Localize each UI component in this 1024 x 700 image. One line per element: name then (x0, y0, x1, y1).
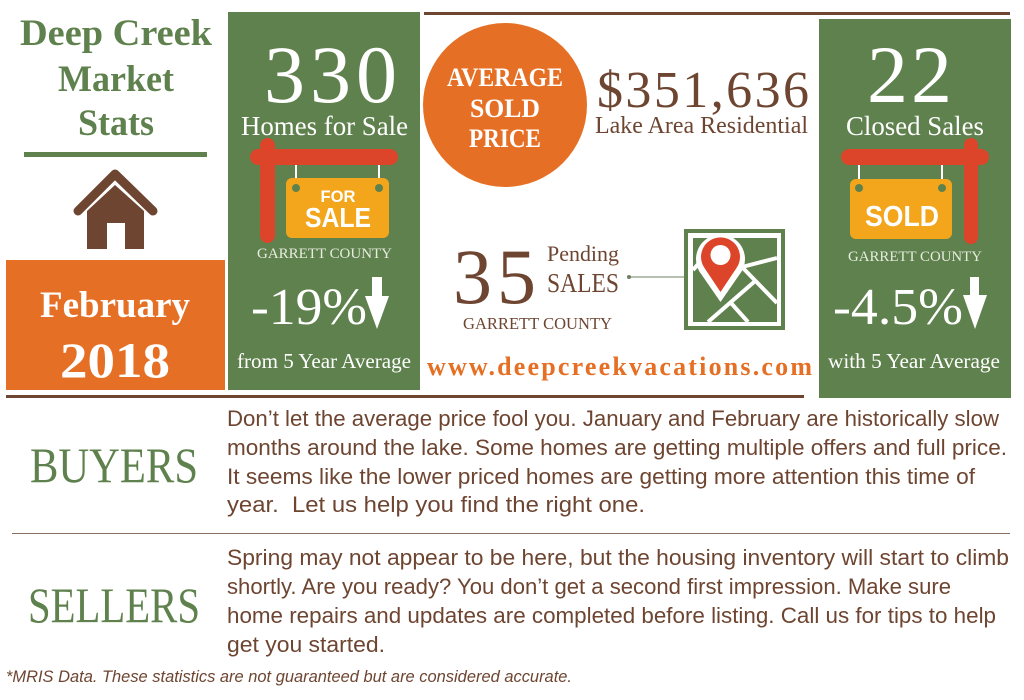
count: 330: 330 (264, 29, 397, 120)
text block: buyers advice: It seems like the lower priced homes are getting more attention this time of (227, 464, 976, 489)
text block: buyers advice: months around the lake. Some homes are getting multiple offers and full price. (227, 435, 1007, 460)
average sold price badge: AVERAGE (447, 63, 563, 92)
label: homes for sale: Homes for Sale (241, 111, 408, 141)
footnote: *MRIS Data. These statistics are not guaranteed but are considered accurate. (6, 667, 572, 686)
icon: for sale sign: FOR (320, 187, 356, 206)
date panel (6, 260, 225, 390)
pending sales: GARRETT COUNTY (463, 314, 612, 333)
pending sales: SALES (547, 268, 619, 298)
label: closed sales: Closed Sales (846, 111, 984, 141)
label: garrett county: GARRETT COUNTY (257, 246, 392, 262)
label: from 5 year average: from 5 Year Average (237, 349, 411, 373)
change: -4.5%: -4.5% (833, 279, 963, 336)
text block: buyers advice: Don’t let the average price fool you. January and February are historically slow (227, 406, 999, 431)
panel: closed sales (819, 19, 1011, 398)
website url: www.deepcreekvacations.com (427, 352, 812, 381)
icon: house (78, 174, 153, 249)
pending sales (453, 233, 619, 333)
average sold price badge: SOLD (470, 94, 540, 123)
average price value: $351,636 (597, 62, 809, 119)
average price value: Lake Area Residential (595, 113, 808, 139)
title: Market (58, 59, 175, 100)
title: Deep Creek (20, 13, 212, 54)
date panel: 2018 (60, 332, 170, 388)
text block: buyers advice (227, 406, 1007, 517)
count: 22: 22 (867, 29, 952, 120)
pending sales: 35 (453, 233, 536, 320)
icon: down arrow (963, 277, 987, 329)
icon: sold sign (841, 138, 989, 244)
average sold price badge (423, 23, 587, 187)
pending sales: Pending (547, 241, 619, 266)
text block: sellers advice (227, 545, 1009, 657)
average sold price badge: PRICE (469, 124, 541, 153)
date panel: February (40, 285, 190, 326)
title: Stats (78, 103, 154, 144)
text block: sellers advice: Spring may not appear to be here, but the housing inventory will start to climb (227, 545, 1009, 570)
label: garrett county: GARRETT COUNTY (848, 249, 982, 265)
icon: map with pin (627, 229, 785, 330)
panel: homes for sale (228, 12, 420, 390)
heading: sellers: SELLERS (28, 577, 200, 633)
change: -19%: -19% (251, 279, 367, 336)
icon: for sale sign: SALE (305, 202, 371, 233)
icon: down arrow (365, 277, 389, 329)
text block: buyers advice: year. Let us help you find the right one. (227, 492, 645, 517)
title (20, 13, 212, 144)
icon: sold sign: SOLD (865, 201, 939, 233)
label: with 5 year average: with 5 Year Average (828, 349, 1000, 373)
text block: sellers advice: home repairs and updates are completed before listing. Call us for tips to help (227, 603, 996, 628)
heading: buyers: BUYERS (30, 437, 198, 493)
text block: sellers advice: get you started. (227, 632, 385, 657)
text block: sellers advice: shortly. Are you ready? You don’t get a second first impression. Make sure (227, 574, 951, 599)
icon: for sale sign (250, 138, 398, 243)
